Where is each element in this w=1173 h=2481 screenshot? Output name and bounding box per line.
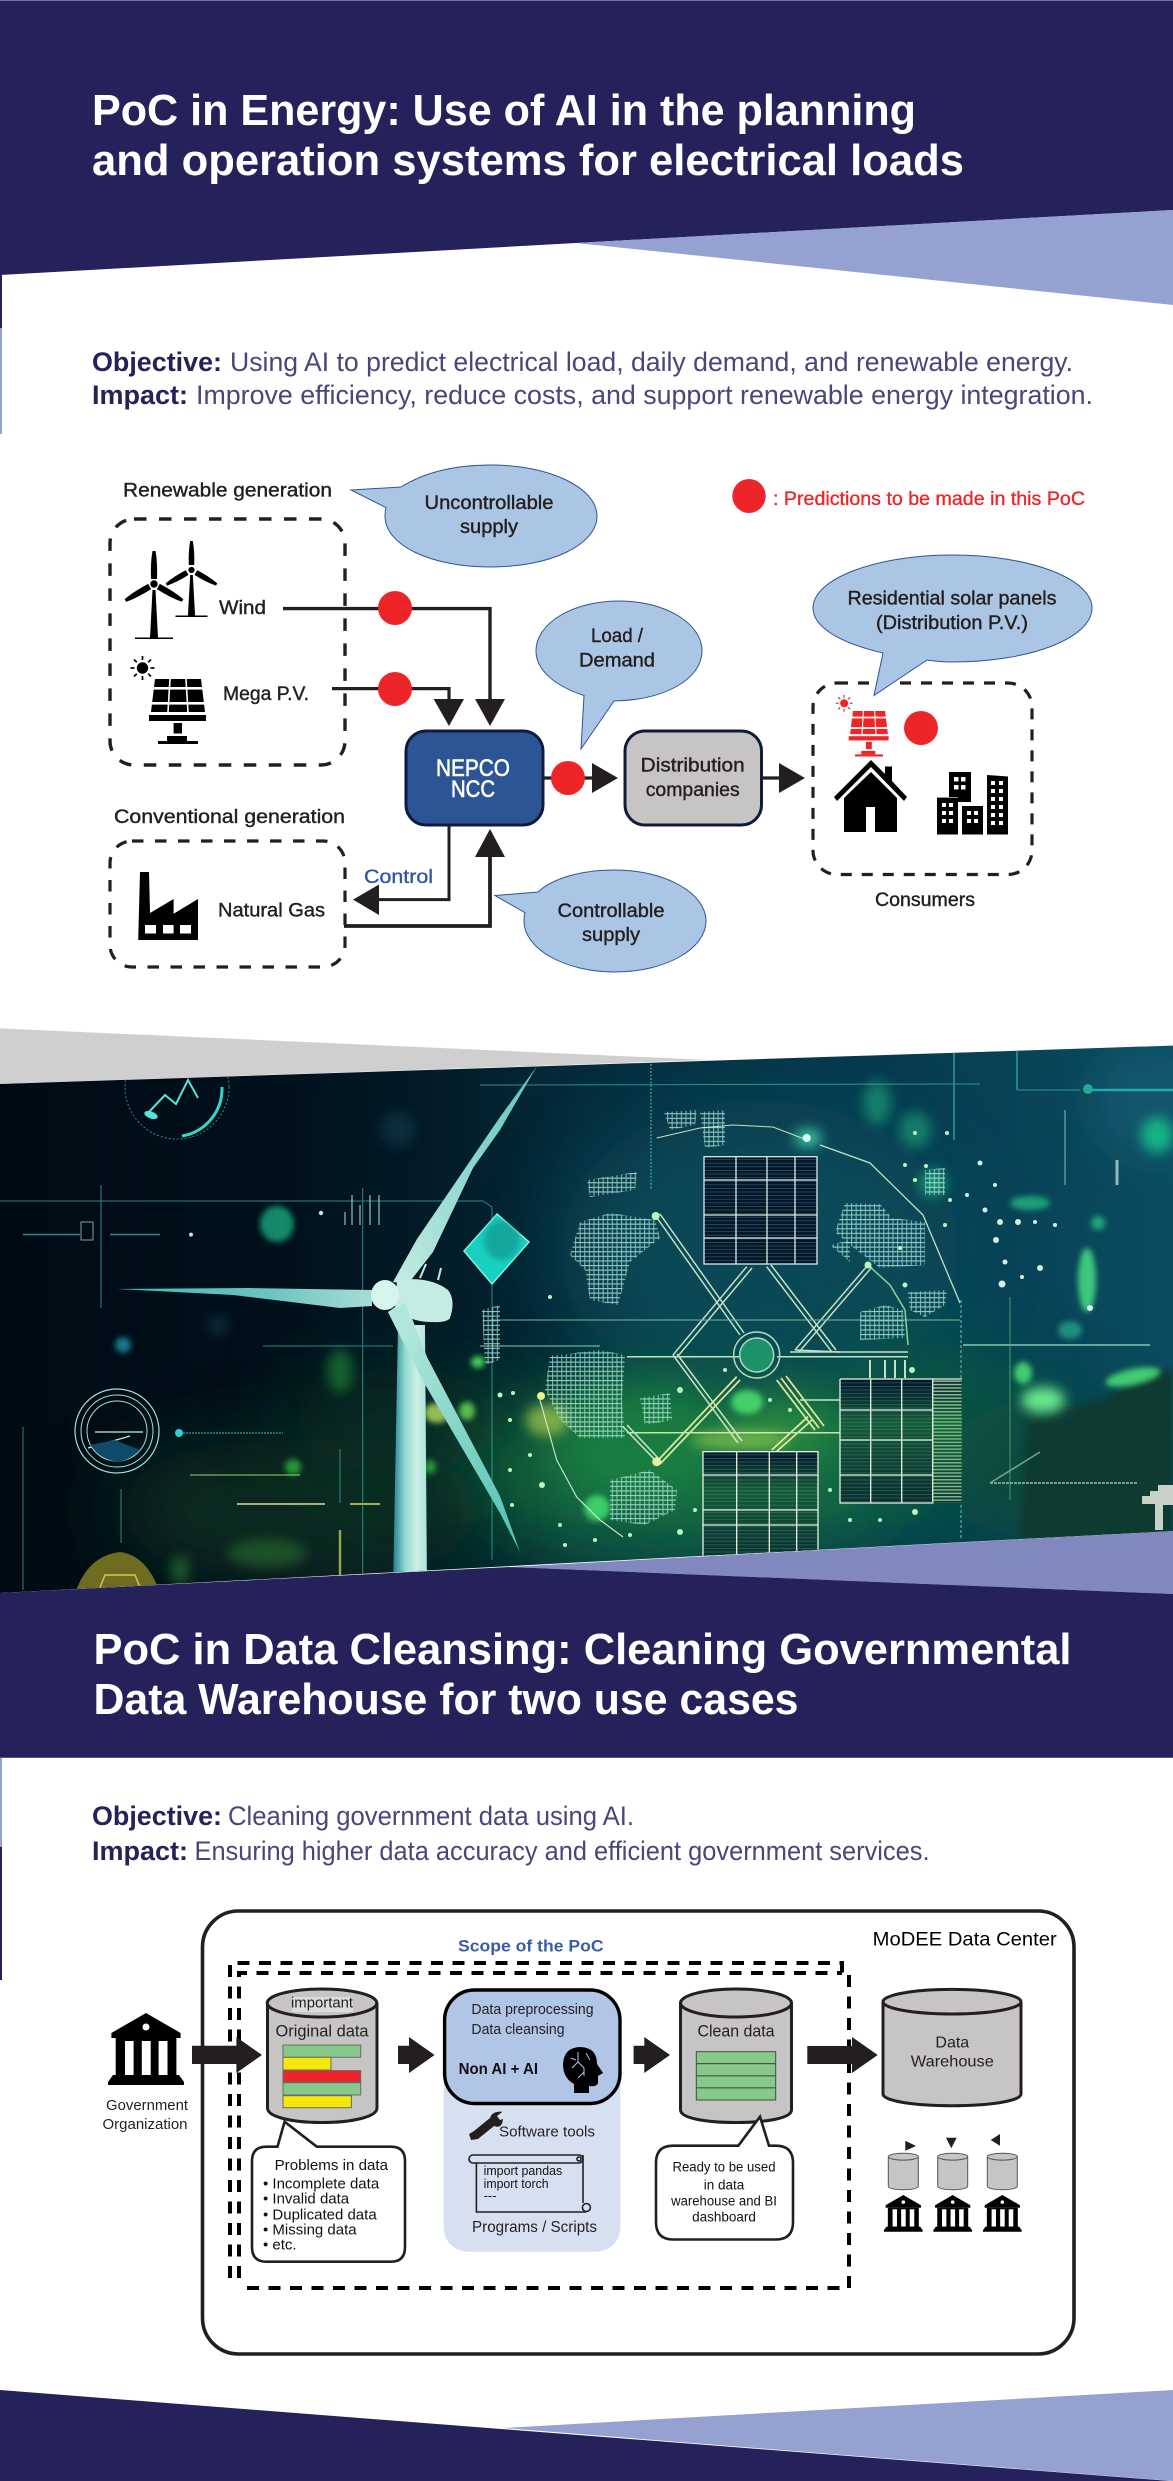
- dot-grid continents: [482, 1110, 947, 1525]
- light blue header wedge: [576, 210, 1173, 305]
- box: data preprocessing: Data cleansing: [471, 2021, 565, 2038]
- callout: problems in data: Problems in data: [275, 2157, 389, 2174]
- objective and impact text: data cleansing: [92, 1801, 930, 1866]
- callout: residential solar panels: [813, 555, 1092, 696]
- code text: ---: [484, 2188, 497, 2203]
- label: control: Control: [364, 866, 433, 888]
- box: NEPCO NCC: NCC: [451, 776, 495, 803]
- panel bottom: [703, 1452, 818, 1562]
- dashed boundary: scope: [230, 1963, 849, 2288]
- arrow: processing to clean data: [634, 2037, 670, 2073]
- objective and impact text: energy: Improve efficiency, reduce costs, and support renewable energy integration.: [196, 380, 1093, 410]
- label: software tools: Software tools: [499, 2124, 595, 2141]
- arrow: clean data to warehouse: [807, 2037, 878, 2073]
- objective and impact text: data cleansing: Ensuring higher data accuracy and efficient government services.: [194, 1836, 930, 1866]
- icon: government organization: [108, 2013, 184, 2085]
- callout: load demand: Load /: [591, 625, 644, 647]
- heading: conventional generation: Conventional generation: [114, 806, 345, 828]
- callout: uncontrollable supply: supply: [460, 516, 518, 538]
- callout: ready to be used: warehouse and BI: [670, 2194, 777, 2209]
- agency databases and icons: [884, 2134, 1022, 2232]
- label: wind: Wind: [219, 597, 266, 619]
- panel: software tools: [444, 2010, 620, 2252]
- box: distribution companies: Distribution: [641, 755, 745, 777]
- panel: consumers: [813, 555, 1092, 911]
- grey wedge above image: [0, 1028, 710, 1084]
- callout: problems in data: • Invalid data: [263, 2190, 350, 2207]
- sparkles: [498, 1131, 1093, 1552]
- database: original data: important: [291, 1995, 354, 2012]
- label: programs and scripts: Programs / Scripts: [472, 2219, 597, 2236]
- code text: [484, 2163, 563, 2203]
- label: mega PV: Mega P.V.: [223, 683, 309, 705]
- objective and impact text: energy: Using AI to predict electrical load, daily demand, and renewable energy.: [230, 347, 1073, 377]
- panel: renewable generation: [110, 480, 345, 765]
- arrow: natural gas to NEPCO: [344, 829, 505, 926]
- panel right: [840, 1379, 962, 1503]
- callout: controllable supply: supply: [582, 924, 640, 946]
- image: wind turbine and solar panels on a digital globe: [0, 1035, 1173, 1600]
- light purple wedge: [509, 1531, 1173, 1594]
- database: data warehouse: [883, 1989, 1021, 2106]
- panel: MoDEE data center: [202, 1911, 1074, 2354]
- icon: red solar panel: [836, 695, 889, 756]
- label: government organization: Government: [106, 2097, 189, 2114]
- navy footer wedge: [0, 2390, 1170, 2481]
- navy header shape: [0, 1567, 1173, 1757]
- icon: buildings: [937, 772, 1008, 834]
- box: NEPCO NCC: [406, 731, 543, 825]
- dashed box: renewable: [110, 519, 345, 765]
- title: data cleansing: [94, 1625, 1072, 1724]
- icon: AI head: [563, 2047, 603, 2093]
- label: MoDEE data center: MoDEE Data Center: [873, 1929, 1057, 1951]
- prediction markers: [378, 591, 938, 795]
- icon: wind turbines: [124, 541, 218, 639]
- globe network lines: [480, 1124, 960, 1538]
- circuit lines: [0, 1050, 1173, 1590]
- arrow: wind to NEPCO: [283, 609, 505, 726]
- icon: house: [834, 760, 907, 832]
- database: clean data: [680, 1989, 792, 2122]
- code text: import pandas: [484, 2163, 563, 2178]
- database: original data: [267, 1989, 377, 2122]
- icons: government agencies: [884, 2195, 1022, 2232]
- data cleansing diagram: [102, 1911, 1074, 2354]
- light blue footer wedge: [503, 2390, 1173, 2481]
- teal diamond: [464, 1214, 529, 1284]
- database: data warehouse: Warehouse: [911, 2054, 994, 2071]
- energy flow diagram: [110, 465, 1092, 972]
- callout: problems in data: [252, 2122, 405, 2262]
- callout: uncontrollable supply: Uncontrollable: [424, 492, 554, 514]
- title: energy: [92, 86, 964, 185]
- icon: factory: [138, 872, 198, 940]
- footer band: [0, 2390, 1173, 2481]
- turbine: [117, 1066, 537, 1590]
- ambient glows: [110, 1040, 1173, 1585]
- legend: predictions: : Predictions to be made in this PoC: [773, 488, 1085, 510]
- legend: predictions: [732, 479, 1085, 513]
- callout: problems in data: • etc.: [263, 2236, 297, 2253]
- small database 3: [987, 2153, 1017, 2190]
- arrow: distribution to consumers: [761, 763, 805, 793]
- header band: energy section: [0, 0, 1173, 434]
- panel: conventional generation: [110, 806, 345, 967]
- arrow: original data to processing: [398, 2037, 435, 2073]
- small database 2: [938, 2153, 968, 2190]
- objective and impact text: energy: Objective:: [92, 347, 222, 377]
- icon: wrench: [469, 2112, 503, 2140]
- label: government organization: [102, 2097, 189, 2133]
- callout: problems in data: • Duplicated data: [263, 2206, 377, 2223]
- box: data preprocessing: Non AI + AI: [459, 2061, 538, 2078]
- solar panels: [703, 1157, 962, 1562]
- icon: script scroll: [469, 2155, 590, 2212]
- code text: import torch: [484, 2176, 549, 2191]
- corner glyph block: [1142, 1485, 1173, 1530]
- callout: load demand: Demand: [579, 650, 655, 672]
- label: scope: Scope of the PoC: [458, 1937, 604, 1956]
- box: data preprocessing: Data preprocessing: [471, 2001, 594, 2018]
- table rows: [696, 2052, 776, 2100]
- arrow: NEPCO to distribution: [543, 763, 618, 793]
- callout: problems in data: • Missing data: [263, 2221, 357, 2238]
- callout: uncontrollable supply: [351, 465, 597, 567]
- title: data cleansing: PoC in Data Cleansing: Cleaning Governmental: [94, 1625, 1072, 1674]
- scope of the PoC: [230, 1937, 849, 2288]
- bar rows: [283, 2045, 361, 2108]
- panel top: [704, 1157, 817, 1264]
- database: clean data: Clean data: [698, 2022, 775, 2041]
- heading: renewable generation: Renewable generation: [123, 480, 332, 502]
- label: consumers: Consumers: [875, 889, 975, 911]
- arrow: control to natural gas: [353, 825, 449, 915]
- objective and impact text: energy: [92, 347, 1093, 410]
- label: government organization: Organization: [102, 2116, 188, 2133]
- callout: residential solar panels: Residential solar panels: [848, 588, 1057, 610]
- box: data preprocessing: [445, 1990, 620, 2104]
- database: data warehouse: Data: [935, 2035, 969, 2052]
- icon: solar panel: [130, 656, 206, 744]
- gauges: [73, 1035, 379, 1600]
- callout: ready to be used: in data: [704, 2177, 745, 2192]
- callout: problems in data: • Incomplete data: [263, 2175, 380, 2192]
- callout: load demand: [536, 601, 702, 749]
- title: data cleansing: Data Warehouse for two use cases: [94, 1675, 798, 1724]
- navy header shape: [0, 0, 1173, 275]
- box: NEPCO NCC: NEPCO: [436, 755, 510, 782]
- objective and impact text: data cleansing: Cleaning government data using AI.: [228, 1801, 634, 1831]
- flow direction markers: [905, 2134, 1000, 2151]
- box: distribution companies: [625, 731, 762, 825]
- database: original data: Original data: [276, 2022, 369, 2041]
- callout: ready to be used: [656, 2117, 793, 2240]
- title: energy: and operation systems for electrical loads: [92, 136, 964, 185]
- objective and impact text: energy: Impact:: [92, 380, 188, 410]
- box: distribution companies: companies: [646, 779, 740, 801]
- arrow: government to original data: [192, 2037, 262, 2073]
- callout: ready to be used: Ready to be used: [672, 2160, 776, 2175]
- dashed box: conventional: [110, 841, 345, 967]
- label: natural gas: Natural Gas: [218, 900, 325, 922]
- callout: controllable supply: Controllable: [558, 900, 664, 922]
- dashed box: consumers: [813, 683, 1032, 874]
- small database 1: [888, 2153, 918, 2190]
- header band: data cleansing section: [0, 1531, 1173, 1980]
- callout: residential solar panels: (Distribution P.V.): [876, 612, 1028, 634]
- callout: ready to be used: dashboard: [692, 2209, 756, 2224]
- callout: controllable supply: [495, 870, 706, 972]
- objective and impact text: data cleansing: Objective:: [92, 1801, 222, 1831]
- arrow: mega PV to NEPCO: [332, 689, 464, 726]
- title: energy: PoC in Energy: Use of AI in the planning: [92, 86, 916, 135]
- objective and impact text: data cleansing: Impact:: [92, 1836, 188, 1866]
